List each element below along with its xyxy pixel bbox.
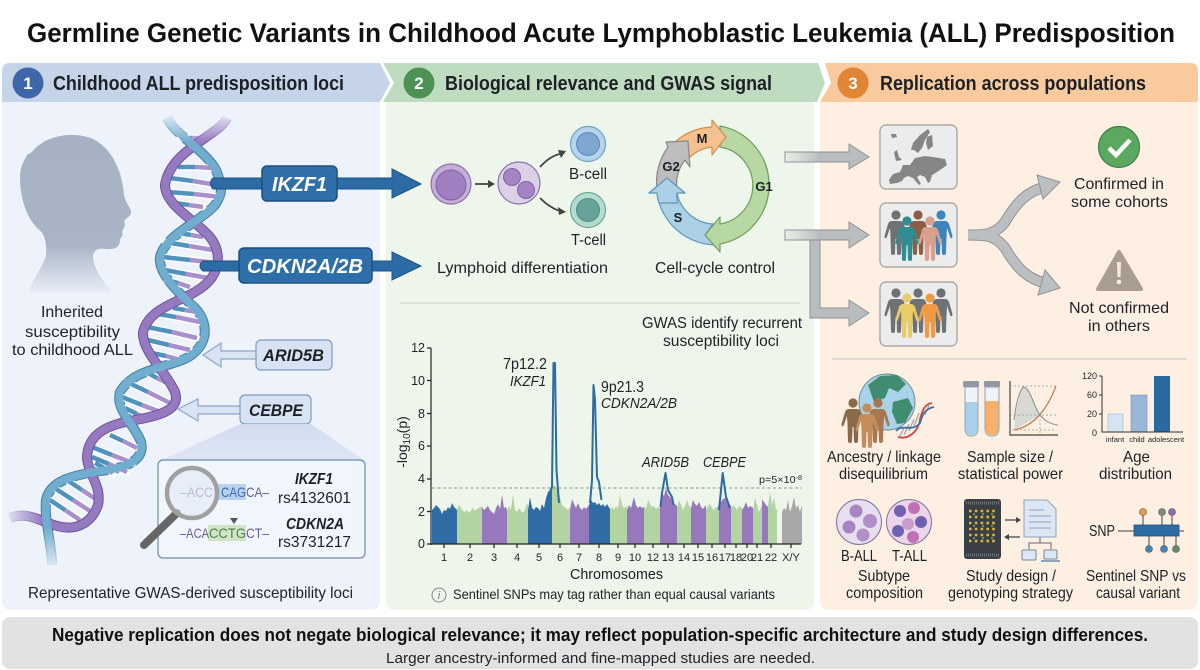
icon: B-cell <box>569 126 607 183</box>
y axis labels: 4 <box>418 472 425 486</box>
text: inherited susceptibility <box>12 304 133 359</box>
inset: variant magnifier: –ACC <box>180 484 213 500</box>
factor: age distribution <box>1082 371 1185 483</box>
x axis labels: 2 <box>467 552 473 564</box>
factor: age distribution: distribution <box>1099 466 1172 483</box>
arrow: IKZF1 to differentiation: IKZF1 <box>272 174 327 196</box>
factor: sentinel SNP: SNP <box>1089 523 1115 540</box>
icon: T-cell <box>570 192 606 249</box>
factor: study design: Study design / <box>966 568 1056 585</box>
header: panel 2 <box>383 63 825 102</box>
diagram: cell cycle: M <box>697 131 707 146</box>
x axis labels: 21 <box>751 552 763 564</box>
factor: age distribution: child <box>1129 435 1145 444</box>
text: inherited susceptibility: to childhood ALL <box>12 342 133 359</box>
factor: age distribution: adolescent <box>1148 435 1185 444</box>
x axis labels: 16 <box>706 552 718 564</box>
chart: Manhattan plot <box>394 341 802 583</box>
arrow: CEBPE: CEBPE <box>249 401 304 420</box>
factor: ancestry <box>827 374 941 483</box>
factor: subtype composition: T-ALL <box>892 548 927 565</box>
text: GWAS identify recurrent loci: susceptibility loci <box>663 333 779 350</box>
factor: ancestry: Ancestry / linkage <box>827 449 941 466</box>
y axis labels: 12 <box>411 341 425 355</box>
y axis labels: 8 <box>418 407 425 421</box>
factor: age distribution: infant <box>1106 435 1125 444</box>
peak labels: CDKN2A/2B <box>601 395 677 412</box>
y axis title: 10 <box>402 433 413 444</box>
outcome: not confirmed: in others <box>1088 318 1150 335</box>
factor: age distribution: 60 <box>1087 390 1097 400</box>
factor: sentinel SNP <box>1086 508 1186 602</box>
factor: subtype composition <box>836 500 932 602</box>
conclusion bar: Larger ancestry-informed and fine-mapped studies are needed. <box>386 650 815 667</box>
factor: age distribution: 0 <box>1092 428 1097 438</box>
inset: variant magnifier: CA– <box>246 484 269 500</box>
x axis labels: 7 <box>576 552 582 564</box>
x axis labels: 17 <box>719 552 731 564</box>
y axis labels <box>411 341 425 551</box>
y axis title: (p) <box>394 416 410 433</box>
peak labels: CEBPE <box>703 454 747 471</box>
factor: sentinel SNP: causal variant <box>1096 585 1180 602</box>
y axis labels: 10 <box>411 374 425 388</box>
factor: age distribution: 120 <box>1082 371 1097 381</box>
y axis labels: 2 <box>418 505 425 519</box>
box: Europe map <box>880 125 957 189</box>
x axis labels: 10 <box>629 552 641 564</box>
header: panel 2: 2 <box>414 74 424 93</box>
factor: sentinel SNP: Sentinel SNP vs <box>1086 568 1186 585</box>
header: panel 3 <box>820 63 1198 102</box>
text: inherited susceptibility: susceptibility <box>25 324 120 341</box>
diagram: cell cycle: G2 <box>662 159 680 174</box>
x axis labels: 13 <box>662 552 674 564</box>
diagram: cell cycle <box>649 120 775 277</box>
x axis labels: 5 <box>536 552 542 564</box>
factor: age distribution: 20 <box>1087 409 1097 419</box>
inset: variant magnifier: CDKN2A <box>286 516 344 533</box>
peak labels: -8 <box>796 475 802 482</box>
factor: subtype composition: composition <box>846 585 923 602</box>
header: panel 1: 1 <box>23 74 33 93</box>
header: panel 3: Replication across populations <box>880 73 1146 95</box>
x axis labels: 3 <box>491 552 497 564</box>
peak labels: 9p21.3 <box>601 379 644 396</box>
x axis labels: 14 <box>678 552 690 564</box>
inset: variant magnifier: –ACA <box>180 525 210 541</box>
text: inherited susceptibility: Inherited <box>41 304 103 321</box>
caption: representative loci: Representative GWAS-derived susceptibility loci <box>28 585 353 602</box>
outcome: confirmed <box>1071 126 1168 211</box>
arrows: into population boxes <box>785 144 869 326</box>
header: panel 3: 3 <box>848 74 858 93</box>
diagram: cell cycle: Cell-cycle control <box>655 260 775 277</box>
peak labels: IKZF1 <box>510 373 546 390</box>
header: panel 2: Biological relevance and GWAS signal <box>445 73 772 95</box>
icon: DNA helix <box>2 112 236 572</box>
y axis labels: 6 <box>418 439 425 453</box>
x axis labels: 4 <box>514 552 520 564</box>
title: Germline Genetic Variants in Childhood Acute Lymphoblastic Leukemia (ALL) Predisposition <box>27 18 1175 48</box>
diagram: lymphoid differentiation <box>431 126 608 277</box>
conclusion bar <box>2 617 1198 669</box>
factor: ancestry: disequilibrium <box>839 466 928 483</box>
peak labels: 7p12.2 <box>503 356 547 373</box>
arrow: ARID5B <box>203 340 332 370</box>
outcome: confirmed: some cohorts <box>1071 194 1168 211</box>
panel: predisposition loci <box>2 63 390 610</box>
panel: biological relevance <box>383 63 825 610</box>
y axis title: -log <box>394 444 410 468</box>
diagram: lymphoid differentiation: Lymphoid differentiation <box>437 260 608 277</box>
panel: replication across populations <box>785 63 1198 610</box>
outcome: confirmed: Confirmed in <box>1074 176 1164 193</box>
inset: variant magnifier: rs3731217 <box>278 534 351 551</box>
note: sentinel SNPs: Sentinel SNPs may tag rather than equal causal variants <box>453 586 775 602</box>
factor: sample size: statistical power <box>958 466 1064 483</box>
outcome: not confirmed: Not confirmed <box>1069 300 1169 317</box>
arrow: CEBPE <box>178 395 311 424</box>
inset: variant magnifier: CAG <box>221 484 246 500</box>
x axis labels: 6 <box>557 552 563 564</box>
peak labels: p=5×10 <box>759 474 795 486</box>
outcome: not confirmed <box>1069 252 1169 335</box>
x axis labels: 9 <box>615 552 621 564</box>
x axis labels: 22 <box>765 552 777 564</box>
peak labels <box>503 356 802 486</box>
chart: Manhattan plot: Chromosomes <box>570 566 663 583</box>
note: sentinel SNPs: i <box>438 590 441 602</box>
conclusion bar: Negative replication does not negate biological relevance; it may reflect population-specific architecture and study design differences. <box>52 625 1148 645</box>
box: diverse cohort <box>880 203 957 267</box>
factor: subtype composition: B-ALL <box>841 548 877 565</box>
x axis labels: 1 <box>441 552 447 564</box>
icon: B-cell: B-cell <box>569 166 607 183</box>
icon: child silhouette <box>20 135 131 293</box>
inset: variant magnifier <box>144 424 365 558</box>
arrow: fork to outcomes <box>968 175 1060 295</box>
arrow: CDKN2A/2B to differentiation <box>200 248 421 283</box>
factor: sample size <box>958 381 1064 483</box>
factor: subtype composition: Subtype <box>858 568 910 585</box>
box: other cohort <box>880 282 957 346</box>
x axis labels <box>441 552 801 564</box>
factor: age distribution: Age <box>1123 449 1150 466</box>
x axis labels: 8 <box>596 552 602 564</box>
diagram: cell cycle: S <box>674 210 683 225</box>
x axis labels: 18 <box>730 552 742 564</box>
y axis labels: 0 <box>418 537 425 551</box>
header: panel 1: Childhood ALL predisposition loci <box>53 73 344 95</box>
x axis labels: 12 <box>647 552 659 564</box>
peak labels: ARID5B <box>641 454 689 471</box>
arrow: ARID5B: ARID5B <box>262 346 324 365</box>
icon: magnifying glass <box>144 468 217 545</box>
inset: variant magnifier: CT– <box>246 525 269 541</box>
inset: variant magnifier: IKZF1 <box>295 471 333 488</box>
arrow: CDKN2A/2B to differentiation: CDKN2A/2B <box>247 256 363 278</box>
header: panel 1 <box>2 63 390 102</box>
diagram: cell cycle: G1 <box>755 179 773 194</box>
x axis labels: X/Y <box>782 552 801 564</box>
inset: variant magnifier: rs4132601 <box>278 490 351 507</box>
text: GWAS identify recurrent loci: GWAS identify recurrent <box>642 315 803 332</box>
factor: study design: genotyping strategy <box>948 585 1073 602</box>
text: GWAS identify recurrent loci <box>642 315 803 350</box>
x axis labels: 20 <box>741 552 753 564</box>
x axis labels: 15 <box>692 552 704 564</box>
factor: sample size: Sample size / <box>967 449 1053 466</box>
icon: T-cell: T-cell <box>571 232 606 249</box>
inset: variant magnifier: CCTG <box>209 525 246 541</box>
factor: study design <box>948 499 1073 602</box>
arrow: IKZF1 to differentiation <box>210 166 421 201</box>
